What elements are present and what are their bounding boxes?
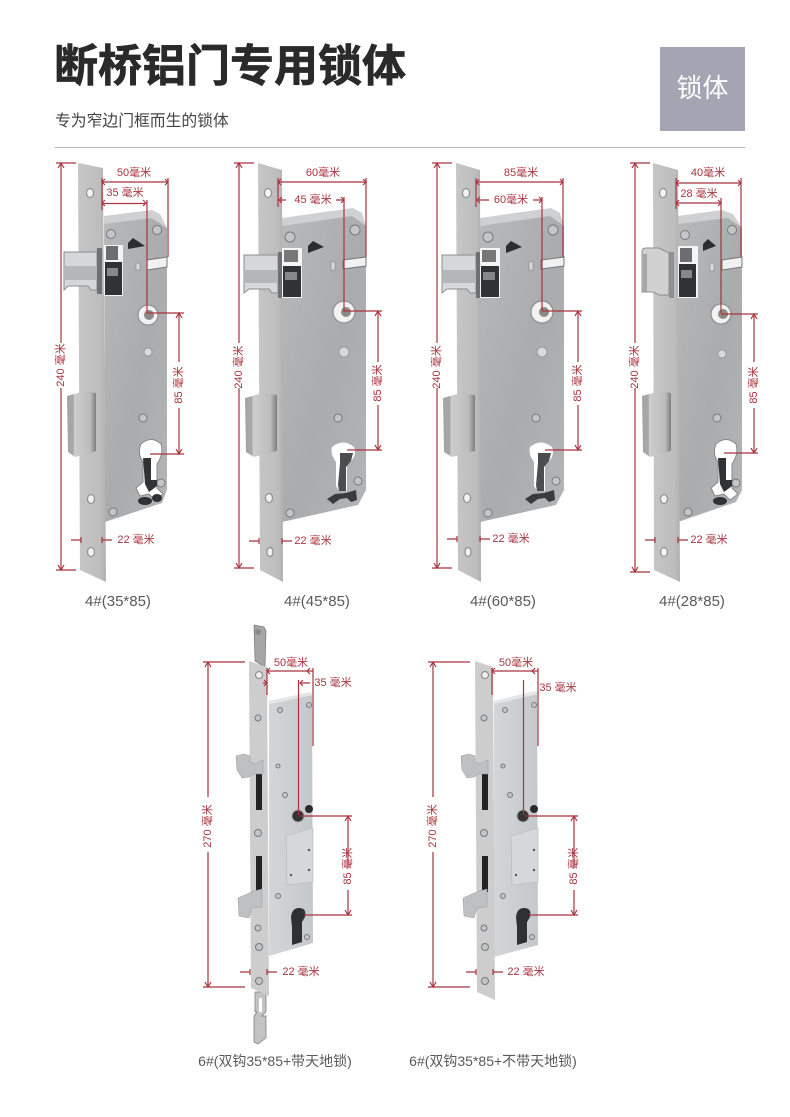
dimensions 4#(35*85): 240 毫米 <box>53 343 67 387</box>
dimensions lock 6# without rods: 85 毫米 <box>566 847 580 885</box>
subtitle: 专为窄边门框而生的锁体 <box>55 112 229 130</box>
dimensions lock 6# with rods: 270 毫米 <box>200 804 214 848</box>
dimensions 4#(45*85): 22 毫米 <box>294 533 332 547</box>
dimensions lock 6# with rods: 50毫米 <box>274 655 308 669</box>
caption 4#(60*85): 4#(60*85) <box>470 593 536 610</box>
caption 4#(45*85): 4#(45*85) <box>284 593 350 610</box>
caption 6# with sky and ground locks: 6#(双钩35*85+带天地锁) <box>198 1053 352 1069</box>
category tag: 锁体 <box>676 73 729 103</box>
dimensions lock 6# without rods: 50毫米 <box>499 655 533 669</box>
dimensions 4#(60*85) <box>429 163 584 568</box>
dimensions 4#(35*85): 22 毫米 <box>117 532 155 546</box>
dimensions 4#(28*85): 28 毫米 <box>680 186 718 200</box>
lock 6# without rods <box>461 661 538 1000</box>
dimensions 4#(45*85): 45 毫米 <box>294 192 332 206</box>
dimensions 4#(60*85): 60毫米 <box>494 192 528 206</box>
dimensions 4#(60*85): 240 毫米 <box>429 345 443 389</box>
dimensions lock 6# with rods: 22 毫米 <box>282 964 320 978</box>
dimensions 4#(45*85): 60毫米 <box>306 165 340 179</box>
lock 4#(28*85) <box>642 163 742 582</box>
dimensions 4#(60*85): 85 毫米 <box>570 364 584 402</box>
caption 6# without sky and ground locks: 6#(双钩35*85+不带天地锁) <box>409 1053 577 1069</box>
dimensions lock 6# without rods: 270 毫米 <box>425 804 439 848</box>
lock 4#(60*85) <box>442 163 564 582</box>
title: 断桥铝门专用锁体 <box>54 42 406 91</box>
lock 4#(45*85) <box>244 163 366 582</box>
dimensions lock 6# with rods: 85 毫米 <box>340 847 354 885</box>
dimensions 4#(35*85): 50毫米 <box>117 165 151 179</box>
dimensions 4#(60*85): 85毫米 <box>504 165 538 179</box>
dimensions 4#(45*85): 240 毫米 <box>231 345 245 389</box>
dimensions lock 6# without rods <box>425 655 580 987</box>
dimensions 4#(28*85): 85 毫米 <box>746 366 760 404</box>
dimensions 4#(35*85): 85 毫米 <box>171 366 185 404</box>
dimensions 4#(28*85): 40毫米 <box>691 165 725 179</box>
lock 6# with top and bottom rods <box>236 625 313 1044</box>
lock 4#(35*85) <box>64 163 167 582</box>
dimensions 4#(35*85) <box>53 163 185 570</box>
dimensions 4#(60*85): 22 毫米 <box>492 531 530 545</box>
dimensions 4#(35*85): 35 毫米 <box>106 185 144 199</box>
dimensions 4#(45*85) <box>231 163 384 568</box>
dimensions 4#(28*85) <box>627 163 760 572</box>
dimensions lock 6# without rods: 22 毫米 <box>507 964 545 978</box>
dimensions 4#(28*85): 240 毫米 <box>627 345 641 389</box>
category tag <box>660 47 745 131</box>
dimensions lock 6# with rods <box>200 655 354 987</box>
dimensions lock 6# without rods: 35 毫米 <box>539 680 577 694</box>
caption 4#(28*85): 4#(28*85) <box>659 593 725 610</box>
dimensions lock 6# with rods: 35 毫米 <box>314 675 352 689</box>
caption 4#(35*85): 4#(35*85) <box>85 593 151 610</box>
dimensions 4#(45*85): 85 毫米 <box>370 364 384 402</box>
dimensions 4#(28*85): 22 毫米 <box>690 532 728 546</box>
